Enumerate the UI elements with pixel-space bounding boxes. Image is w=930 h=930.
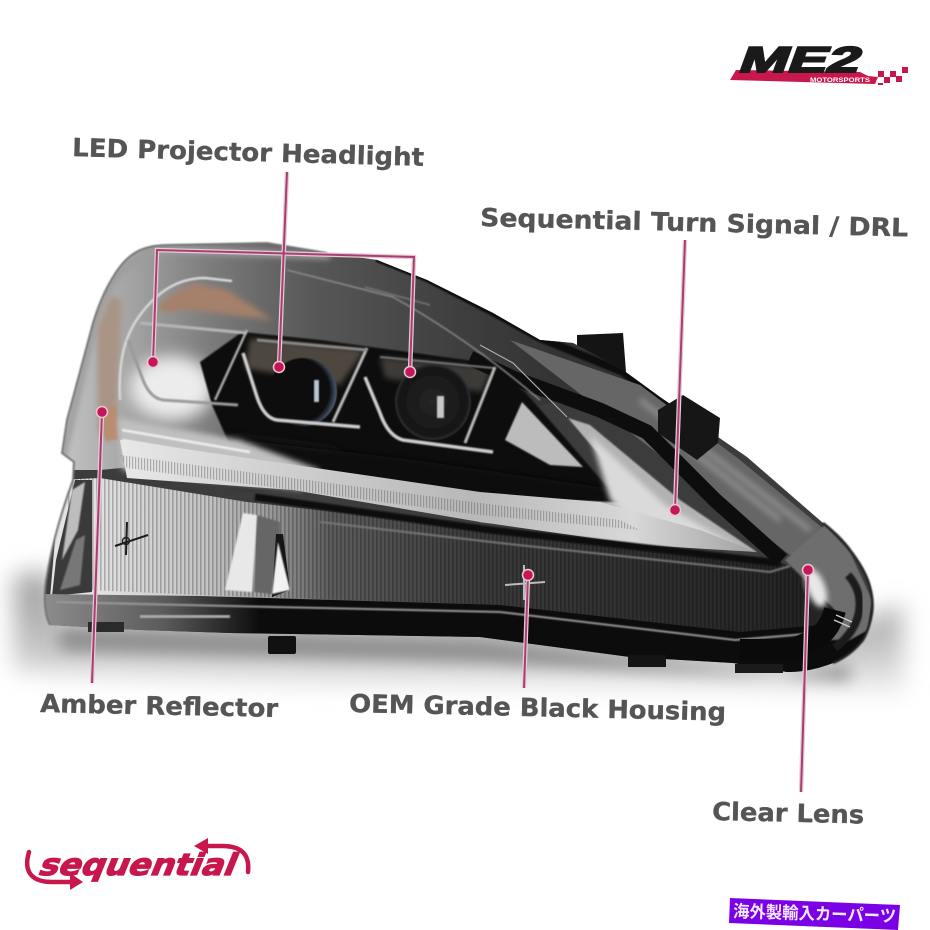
callout: LED projector bracket [148, 172, 416, 378]
headlight illustration [30, 230, 890, 680]
orange sheen [160, 283, 273, 320]
black projector bay [199, 332, 607, 490]
mounting tab: right [735, 664, 783, 673]
projector lens: right [395, 364, 471, 440]
callout: black housing [522, 570, 534, 688]
upper pale bands above DRL [118, 418, 320, 490]
outline: nose and lower edge [823, 523, 873, 663]
logo: sequential: sequential [34, 848, 244, 883]
connector: rear box [577, 333, 626, 372]
amber reflector sheen [97, 295, 122, 445]
logo: sequential [27, 838, 248, 890]
logo: ME2 Motorsports: ME2 [734, 39, 869, 80]
badge: Japanese store label: 海外製輸入カーパーツ [733, 902, 896, 926]
housing lower [50, 478, 840, 640]
housing fin [225, 513, 257, 592]
thin lens curve [480, 345, 567, 417]
center adjuster [505, 565, 545, 600]
connector: side box [658, 395, 720, 460]
logo: ME2 Motorsports [730, 39, 908, 85]
left clip [88, 622, 124, 632]
outer lens outline [45, 243, 327, 625]
label: Amber Reflector: Amber Reflector [40, 689, 279, 723]
projector lens: middle [269, 358, 337, 426]
callout lines and dots [92, 172, 814, 792]
mounting tab: left [268, 636, 296, 654]
DRL band [120, 440, 757, 552]
upper lens [62, 244, 623, 470]
label: OEM Grade Black Housing: OEM Grade Black Housing [349, 689, 726, 727]
callout: amber reflector [92, 406, 108, 683]
turn signal triangle [480, 418, 757, 552]
black band above housing [255, 497, 780, 563]
label: Sequential Turn Signal / DRL: Sequential Turn Signal / DRL [480, 203, 909, 242]
thick black frame [470, 358, 782, 560]
left side lamp edge [52, 480, 92, 596]
mounting tab: center [628, 655, 666, 667]
callout: sequential turn signal [670, 240, 685, 516]
reflector plate [505, 402, 583, 467]
dark gap beneath projectors [252, 441, 402, 480]
clear lens nose [785, 525, 872, 640]
DRL led pattern [120, 455, 640, 530]
logo: ME2 Motorsports: MOTORSPORTS [810, 78, 870, 84]
title label: LED Projector Headlight: LED Projector Headlight [72, 133, 425, 172]
bay brown upper cells [245, 338, 365, 385]
dark panel beside fin [254, 515, 280, 595]
lamp body [30, 230, 890, 680]
bottom trim [45, 594, 872, 672]
outer grey lens right [510, 340, 822, 555]
dark fade towards left [225, 440, 340, 480]
screw mark [115, 522, 148, 555]
label: Clear Lens: Clear Lens [712, 797, 864, 829]
ground shadow [14, 570, 905, 695]
left pale reflection [130, 356, 214, 420]
rim highlight [62, 250, 330, 460]
callout: clear lens [801, 564, 814, 792]
chrome frames [120, 270, 540, 452]
black upper edge [375, 260, 670, 405]
